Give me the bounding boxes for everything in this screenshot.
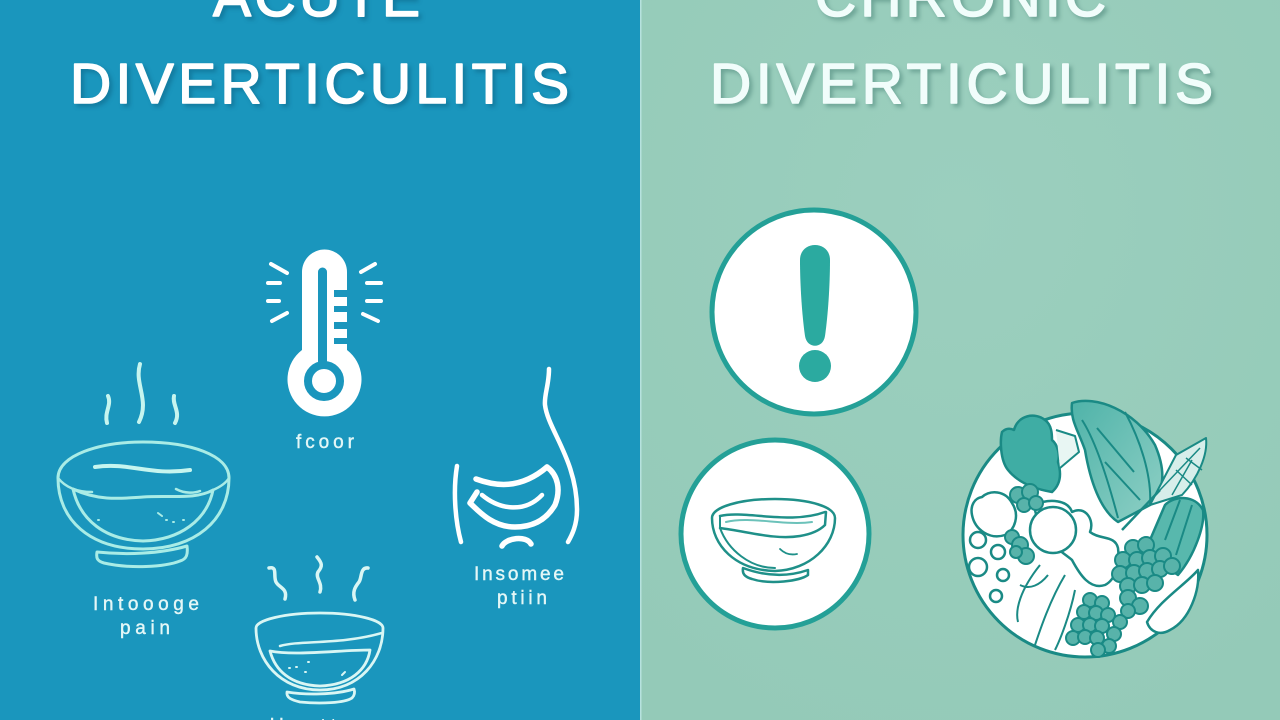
leaf veins: [1082, 412, 1150, 518]
corn: [1150, 438, 1206, 505]
label: intense pain, right: Insomee: [474, 564, 564, 585]
label: intense pain, left: Intoooge: [93, 594, 199, 615]
white produce: [969, 492, 1118, 602]
cucumber: [1150, 498, 1203, 575]
grape clusters: [1005, 484, 1180, 657]
broccoli: [1001, 416, 1060, 492]
icon: bowl badge: [681, 440, 869, 628]
label: intense pain, left: pain: [120, 618, 170, 639]
icon: steaming bowl, large: [58, 364, 229, 567]
panel: acute diverticulitis: [0, 0, 640, 720]
title: chronic diverticulitis: [710, 0, 1213, 116]
label: fever: fcoor: [296, 432, 355, 453]
icon: plate of vegetables: [963, 401, 1207, 657]
white radish: [1147, 570, 1198, 633]
icon: thermometer: [268, 250, 381, 416]
panel: chronic diverticulitis: [640, 0, 1280, 720]
label: intense pain, right: [474, 564, 564, 609]
title: chronic diverticulitis: DIVERTICULITIS: [710, 52, 1213, 116]
icon: exclamation badge: [712, 210, 916, 414]
cucumber stripes: [1165, 500, 1192, 555]
label: intense pain, right: ptiin: [497, 588, 547, 609]
green leaf stems: [1017, 565, 1075, 650]
broccoli stem: [1056, 430, 1079, 468]
corn husk: [1122, 490, 1160, 530]
corn kernels: [1160, 448, 1202, 495]
leafy greens: [1072, 401, 1162, 522]
label: intense pain, left: [93, 594, 199, 639]
title: acute diverticulitis: [70, 0, 569, 116]
icon: steaming bowl, small: [256, 557, 383, 703]
icon: intestines in torso: [455, 369, 577, 546]
title: acute diverticulitis: DIVERTICULITIS: [70, 52, 569, 116]
